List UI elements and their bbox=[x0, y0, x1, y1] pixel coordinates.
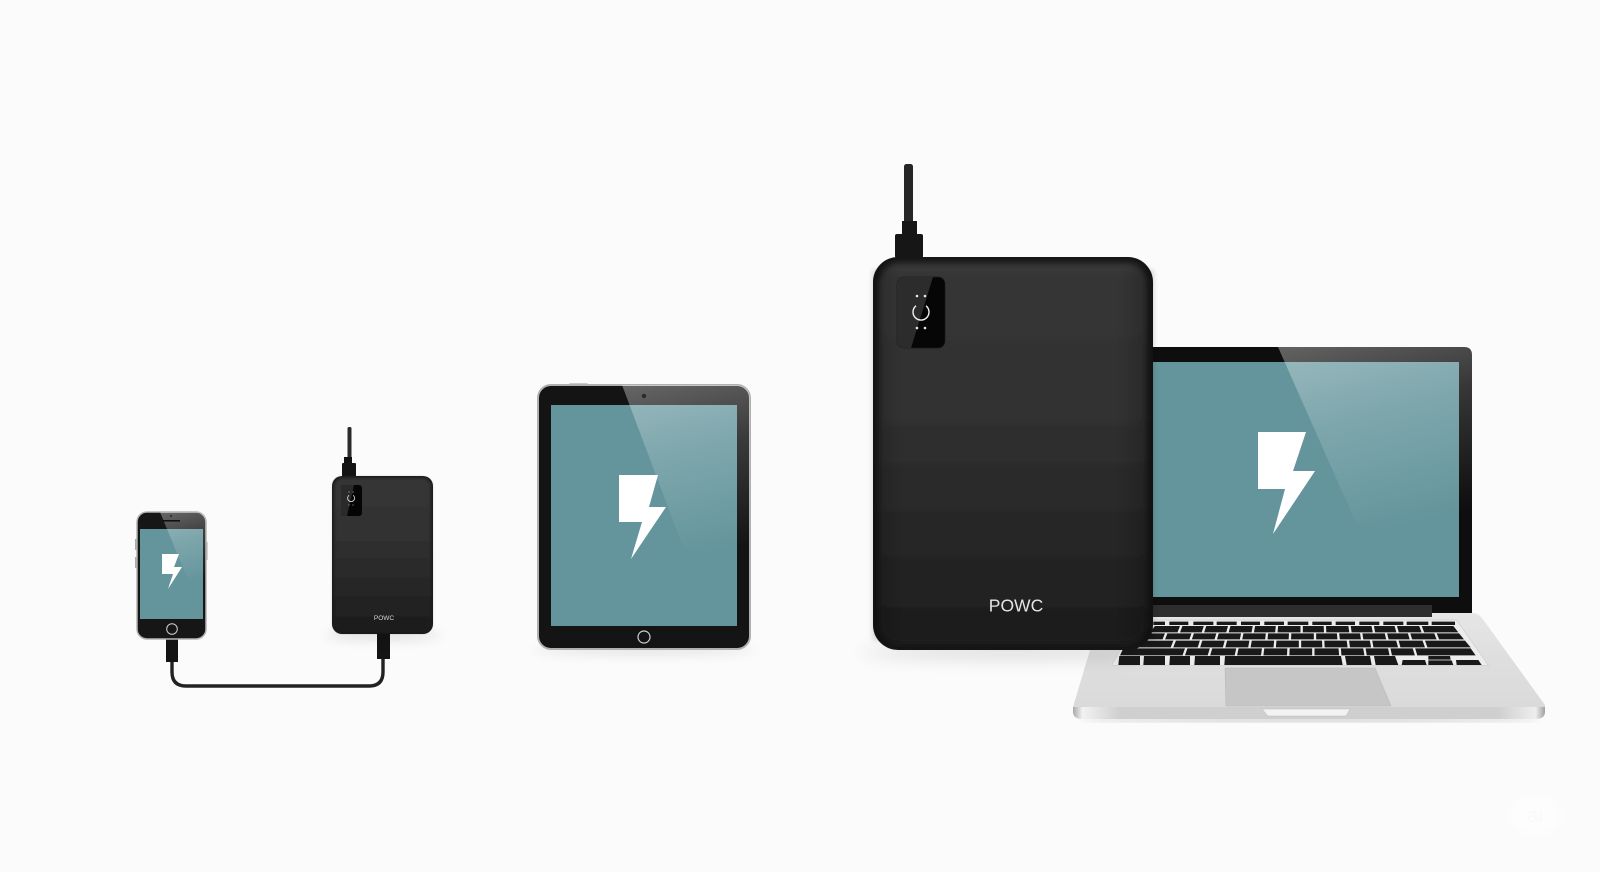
tablet bbox=[532, 384, 756, 653]
large power bank display bbox=[897, 277, 945, 348]
phone screen bbox=[140, 529, 203, 619]
power bank brand label: POWC bbox=[989, 596, 1043, 616]
small power bank display bbox=[341, 485, 362, 516]
laptop base deck bbox=[1073, 613, 1545, 708]
watermark: ai bbox=[1527, 805, 1543, 827]
watermark bbox=[1508, 795, 1562, 835]
laptop keyboard bbox=[1112, 620, 1488, 665]
icon: laptop lightning bolt bbox=[1258, 432, 1315, 534]
tablet screen bbox=[551, 405, 737, 626]
large power bank bbox=[860, 164, 1160, 657]
laptop front lip bbox=[1073, 707, 1545, 719]
laptop bbox=[1073, 347, 1545, 722]
small power bank bbox=[325, 427, 441, 639]
phone bbox=[135, 512, 208, 639]
icon: phone lightning bolt bbox=[162, 554, 182, 589]
small power bank: POWC bbox=[374, 615, 394, 622]
large power bank cable bbox=[895, 164, 923, 258]
laptop lid bbox=[1140, 347, 1472, 617]
icon: tablet lightning bolt bbox=[619, 475, 666, 559]
icon: power ring bbox=[913, 306, 929, 320]
scene: devices and power banks bbox=[135, 164, 1545, 723]
phone charging cable bbox=[166, 634, 390, 686]
laptop trackpad bbox=[1225, 668, 1391, 706]
